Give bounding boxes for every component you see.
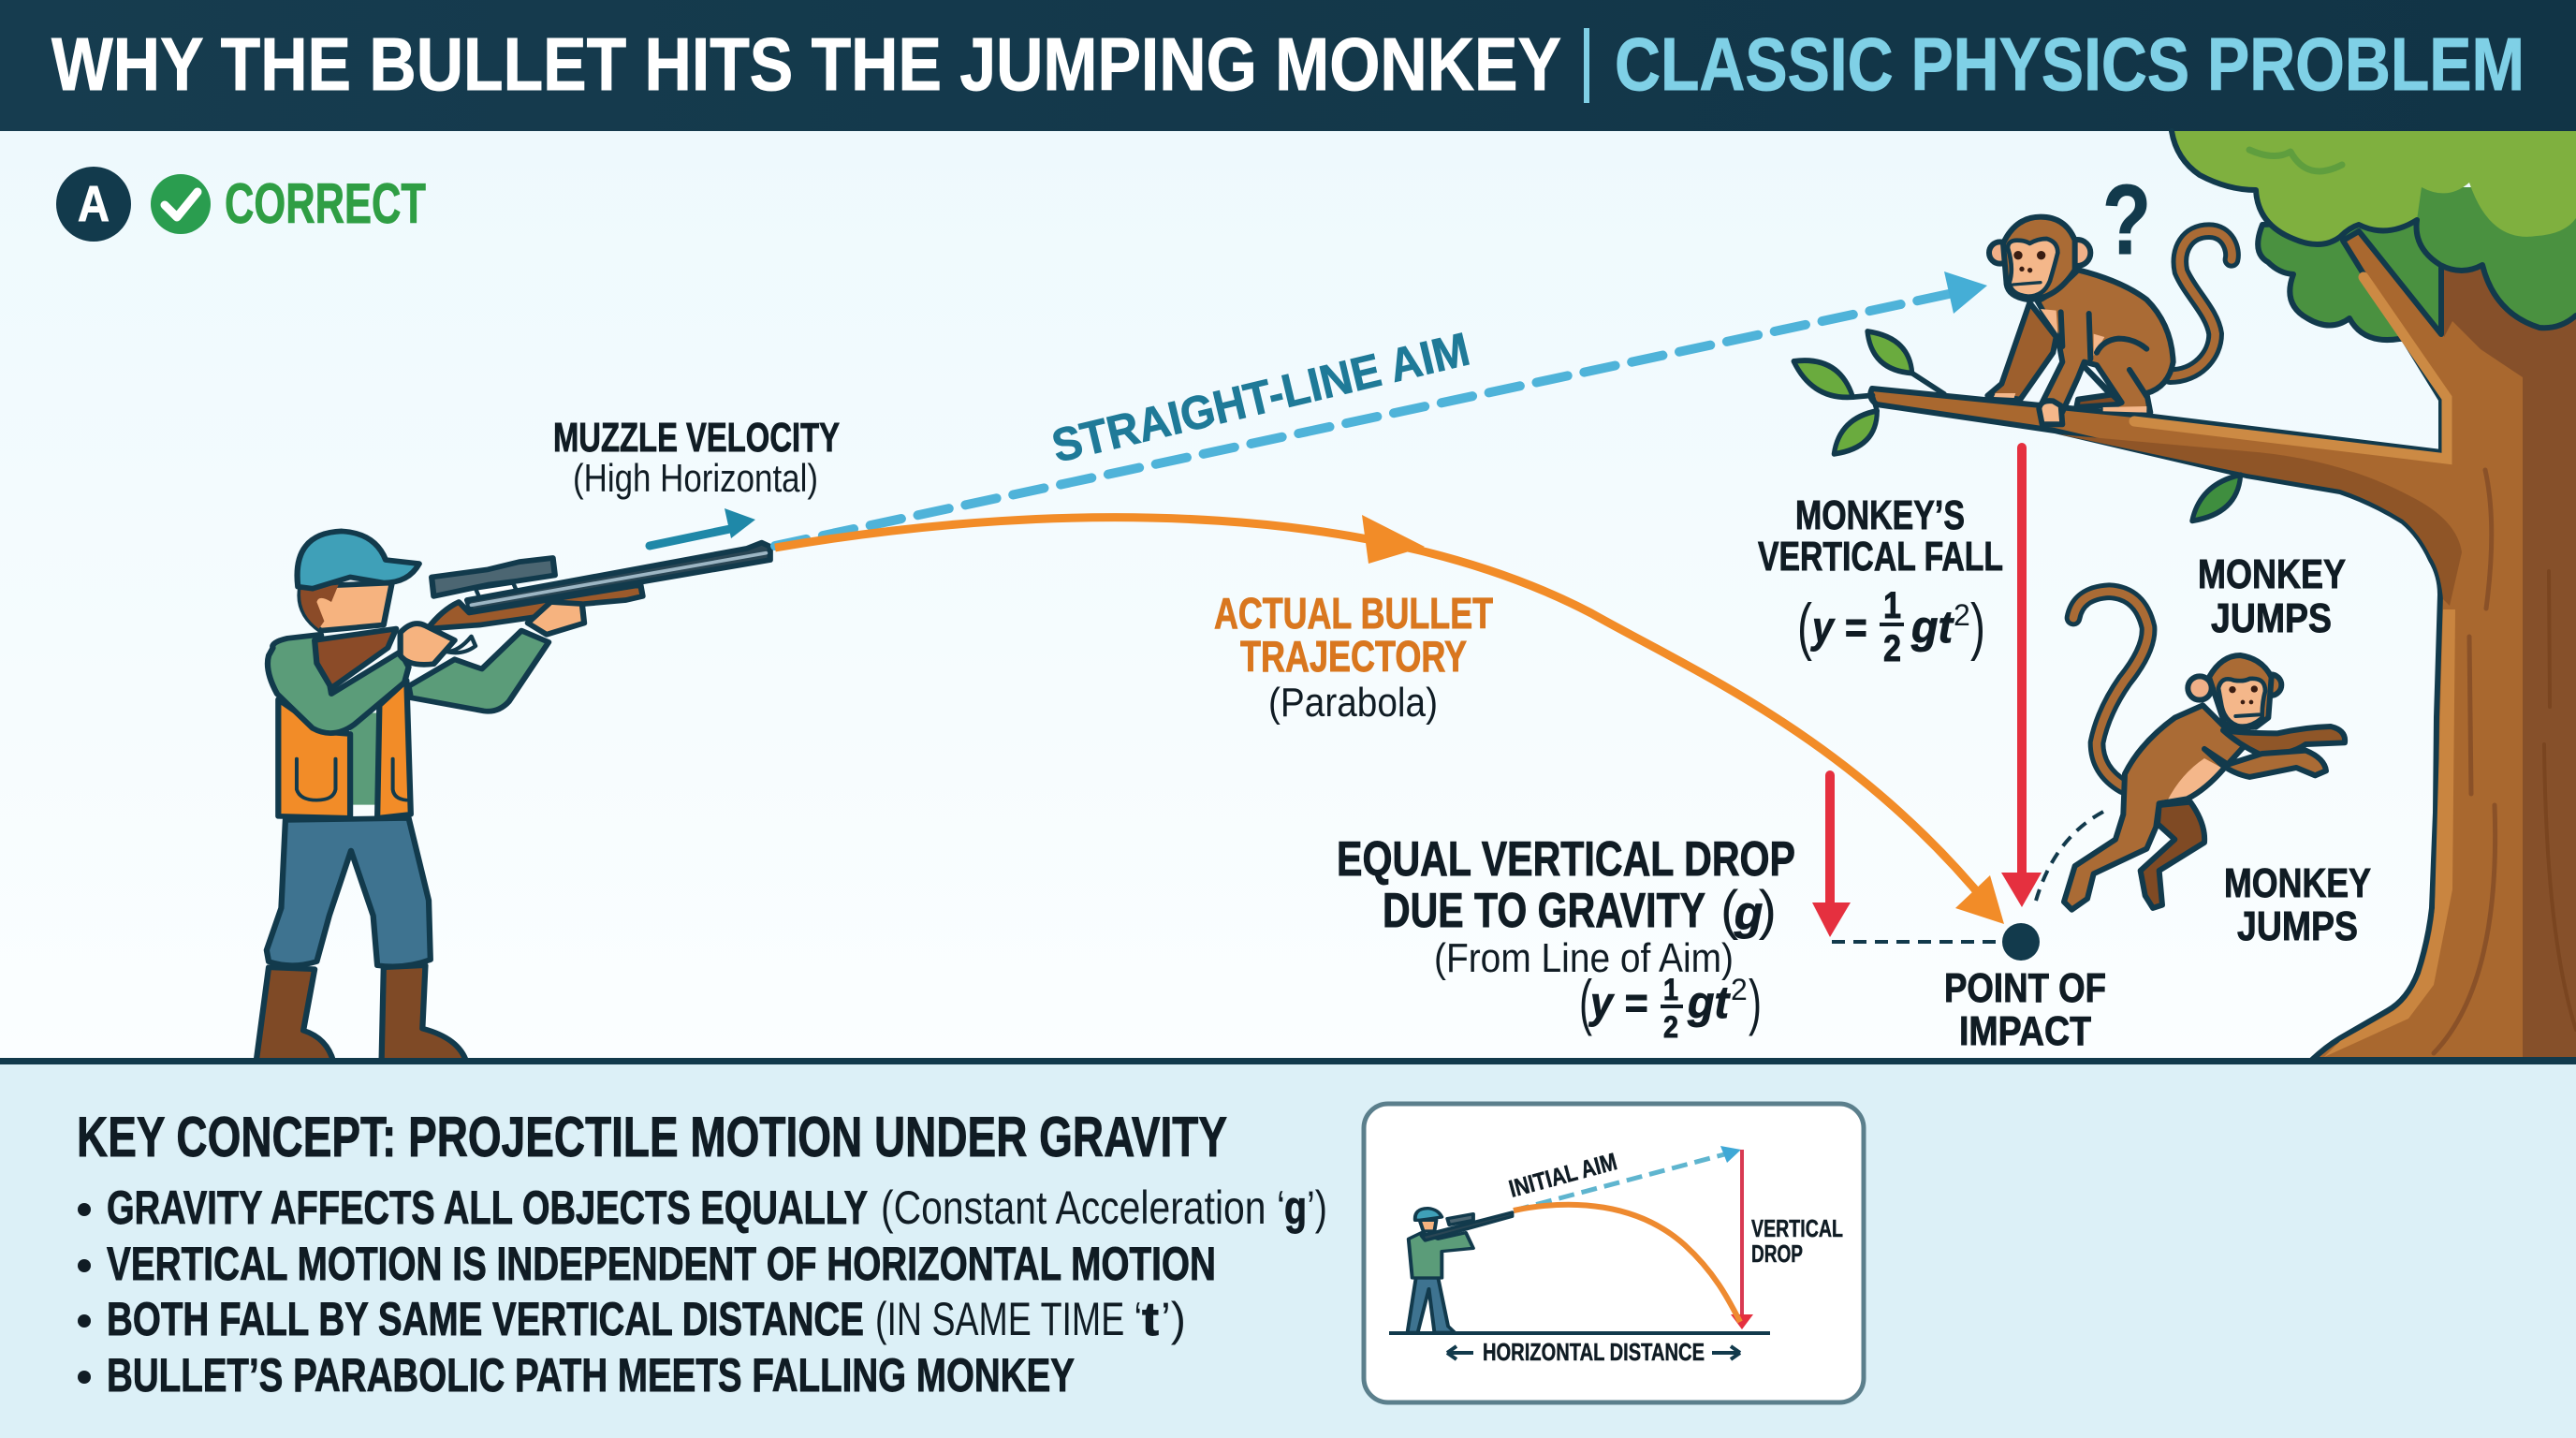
answer badge: A correct: A: [78, 176, 110, 232]
bullet list: BOTH FALL BY SAME VERTICAL DISTANCE: [107, 1293, 864, 1345]
monkey's vertical fall label: (: [1797, 591, 1812, 662]
equal vertical drop label: ): [1749, 967, 1762, 1036]
rifle stock: [315, 629, 396, 688]
point of impact label: IMPACT: [1959, 1008, 2091, 1054]
inset ground: [1389, 1331, 1770, 1335]
key concept panel: [0, 1058, 2576, 1438]
muzzle velocity label: MUZZLE VELOCITY: [553, 415, 840, 461]
answer badge: A correct: [56, 167, 426, 242]
actual bullet trajectory label: (Parabola): [1268, 680, 1438, 726]
trunk bark marks: [2434, 470, 2496, 1053]
trousers: [267, 818, 431, 966]
monkey's vertical fall label: ): [1970, 591, 1985, 662]
monkey sitting on branch: [1987, 217, 2232, 424]
monkey's vertical fall label: 2: [1954, 598, 1970, 632]
boots: [256, 965, 466, 1062]
bullet list: (IN SAME TIME ‘: [875, 1293, 1142, 1345]
muzzle velocity label: (High Horizontal): [573, 456, 818, 500]
shirt: [350, 713, 379, 805]
bullet list: ’): [1161, 1293, 1186, 1345]
equal vertical drop label: 1: [1663, 973, 1678, 1006]
key concept heading: KEY CONCEPT: PROJECTILE MOTION UNDER GRAVITY: [77, 1106, 1227, 1168]
right foliage: [2417, 187, 2576, 328]
bullet list: [78, 1181, 1327, 1401]
equal vertical drop label: (From Line of Aim): [1434, 935, 1734, 981]
head: [300, 583, 392, 631]
actual bullet trajectory label: [1214, 589, 1493, 726]
monkey's vertical fall label: MONKEY’S: [1795, 492, 1965, 538]
hands: [401, 624, 455, 665]
inset distance arrows: [1447, 1346, 1740, 1359]
monkey jumps label upper: JUMPS: [2211, 595, 2332, 641]
equal vertical drop label: (g): [1720, 880, 1777, 941]
equal vertical drop label: EQUAL VERTICAL DROP: [1337, 832, 1795, 887]
inset diagram: [1364, 1104, 1864, 1402]
inset mini hunter: [1408, 1209, 1512, 1332]
rifle barrel: [467, 543, 770, 611]
leaves on branch: [1793, 331, 2241, 521]
header banner: [0, 0, 2576, 131]
question mark: ?: [2102, 165, 2151, 275]
jump path dashes: [2036, 812, 2103, 901]
branch shadow: [2059, 434, 2462, 606]
rear foliage: [2258, 215, 2452, 340]
muzzle velocity arrow: [650, 508, 755, 546]
torso and sleeve: [268, 635, 409, 733]
trunk highlight: [2134, 277, 2447, 459]
bullet list: VERTICAL MOTION IS INDEPENDENT OF HORIZONTAL MOTION: [107, 1238, 1216, 1290]
point of impact marker: [2002, 923, 2040, 961]
inset labels: INITIAL AIM: [1506, 1147, 1620, 1203]
inset vertical drop line: [1740, 1150, 1744, 1320]
scope: [432, 558, 555, 596]
monkey jumps label upper: MONKEY: [2198, 551, 2346, 597]
trunk shaded side: [2444, 267, 2576, 1057]
equal vertical drop label: gt: [1687, 978, 1731, 1028]
bullet list: g: [1284, 1181, 1307, 1234]
trunk and branches: [1870, 231, 2576, 1060]
monkey's vertical fall label: 2: [1883, 628, 1901, 669]
straight-line aim label: STRAIGHT-LINE AIM: [1047, 323, 1474, 473]
monkey's vertical fall label: 1: [1883, 585, 1901, 626]
monkey's vertical fall label: VERTICAL FALL: [1758, 534, 2003, 580]
monkey jumps label lower: [2224, 860, 2371, 949]
equal vertical drop label: 2: [1663, 1010, 1678, 1044]
monkey's vertical fall label: y =: [1810, 603, 1866, 652]
monkey's vertical fall label: gt: [1910, 603, 1954, 653]
equal vertical drop label: DUE TO GRAVITY: [1383, 884, 1705, 938]
monkey jumping: [2064, 592, 2345, 910]
jumping monkey tail: [2073, 592, 2148, 786]
bullet list: t: [1142, 1293, 1159, 1345]
point of impact label: [1944, 965, 2106, 1054]
equal vertical drop label: [1337, 832, 1795, 1044]
vest: [278, 681, 411, 818]
inset diagram: VERTICAL: [1751, 1214, 1843, 1242]
inset diagram: HORIZONTAL DISTANCE: [1483, 1338, 1705, 1366]
rifle wood: [428, 585, 643, 629]
inset aim line: [1514, 1152, 1732, 1211]
straight-line aim dashed arrow: [775, 271, 1987, 546]
bullet list: GRAVITY AFFECTS ALL OBJECTS EQUALLY: [107, 1181, 868, 1234]
equal drop arrow: [1812, 775, 1851, 937]
point of impact label: POINT OF: [1944, 965, 2106, 1011]
inset diagram: DROP: [1751, 1240, 1803, 1268]
bullet list: ’): [1307, 1181, 1327, 1234]
actual bullet trajectory label: ACTUAL BULLET: [1214, 589, 1493, 638]
bullet list: BULLET’S PARABOLIC PATH MEETS FALLING MONKEY: [107, 1349, 1075, 1401]
cap: [298, 531, 419, 589]
actual bullet trajectory curve: [775, 515, 2004, 924]
hunter with rifle: [256, 531, 770, 1062]
tree with branch and foliage: [1870, 131, 2576, 1060]
answer badge: A correct: CORRECT: [225, 172, 426, 235]
equal vertical drop label: 2: [1731, 973, 1748, 1006]
bullet list: (Constant Acceleration ‘: [881, 1181, 1285, 1234]
muzzle velocity label: [553, 415, 840, 500]
actual bullet trajectory label: TRAJECTORY: [1240, 632, 1467, 681]
front foliage: [2172, 131, 2576, 244]
rear arm: [409, 631, 549, 712]
monkey tail: [2170, 231, 2232, 376]
title: WHY THE BULLET HITS THE JUMPING MONKEY: [51, 22, 1561, 106]
monkey vertical fall arrow: [2001, 448, 2042, 907]
monkey's vertical fall label: [1758, 492, 2003, 669]
dashed drop level line: [1832, 940, 2003, 944]
equal vertical drop label: y =: [1588, 978, 1647, 1027]
monkey jumps label upper: [2198, 551, 2346, 641]
monkey jumps label lower: MONKEY: [2224, 860, 2371, 906]
equal vertical drop label: (: [1579, 967, 1592, 1036]
monkey jumps label lower: JUMPS: [2237, 903, 2358, 949]
inset parabola: [1514, 1205, 1740, 1322]
